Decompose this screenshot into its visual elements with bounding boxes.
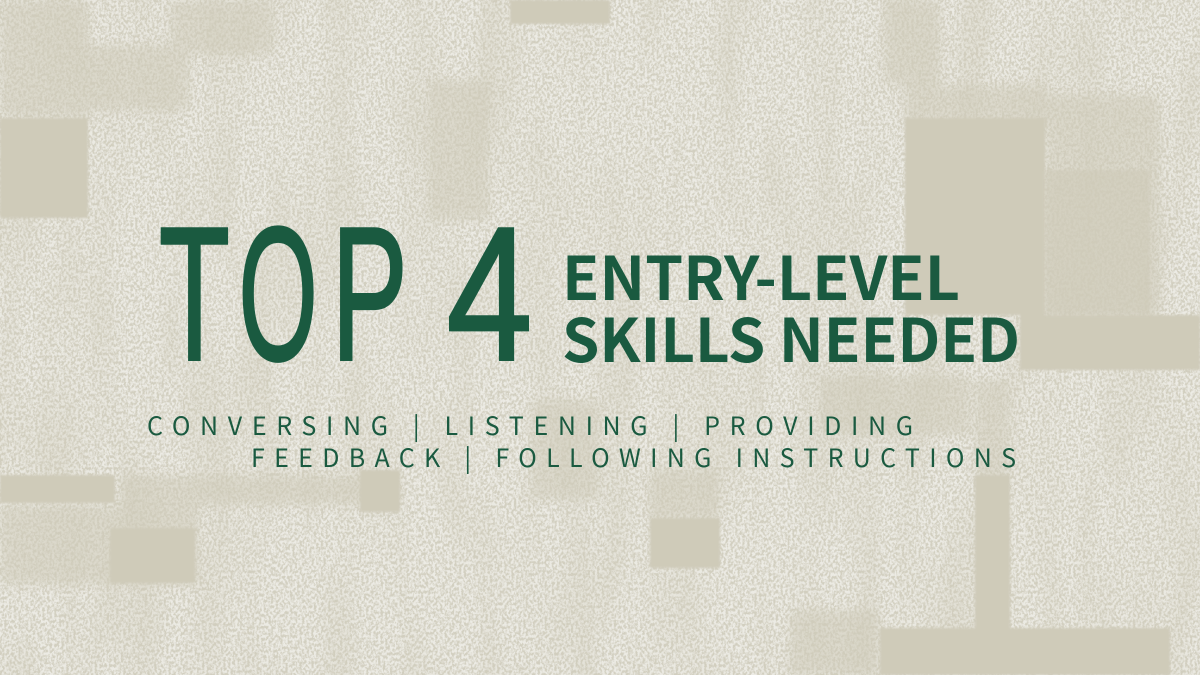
title: TOP 4: O [239, 189, 318, 401]
skills list subtitle [147, 407, 1016, 475]
skills list subtitle: FEEDBACK | FOLLOWING INSTRUCTIONS [251, 439, 1016, 475]
title: TOP 4: T [159, 189, 230, 401]
skills list subtitle: CONVERSING | LISTENING | PROVIDING [147, 407, 913, 443]
heading: entry-level skills needed: ENTRY-LEVEL [562, 231, 960, 318]
heading: entry-level skills needed [562, 231, 1020, 380]
title: TOP 4: 4 [447, 187, 532, 400]
heading: entry-level skills needed: SKILLS NEEDED [562, 293, 1020, 380]
title: TOP 4: P [332, 189, 408, 401]
title: TOP 4 [159, 187, 532, 401]
